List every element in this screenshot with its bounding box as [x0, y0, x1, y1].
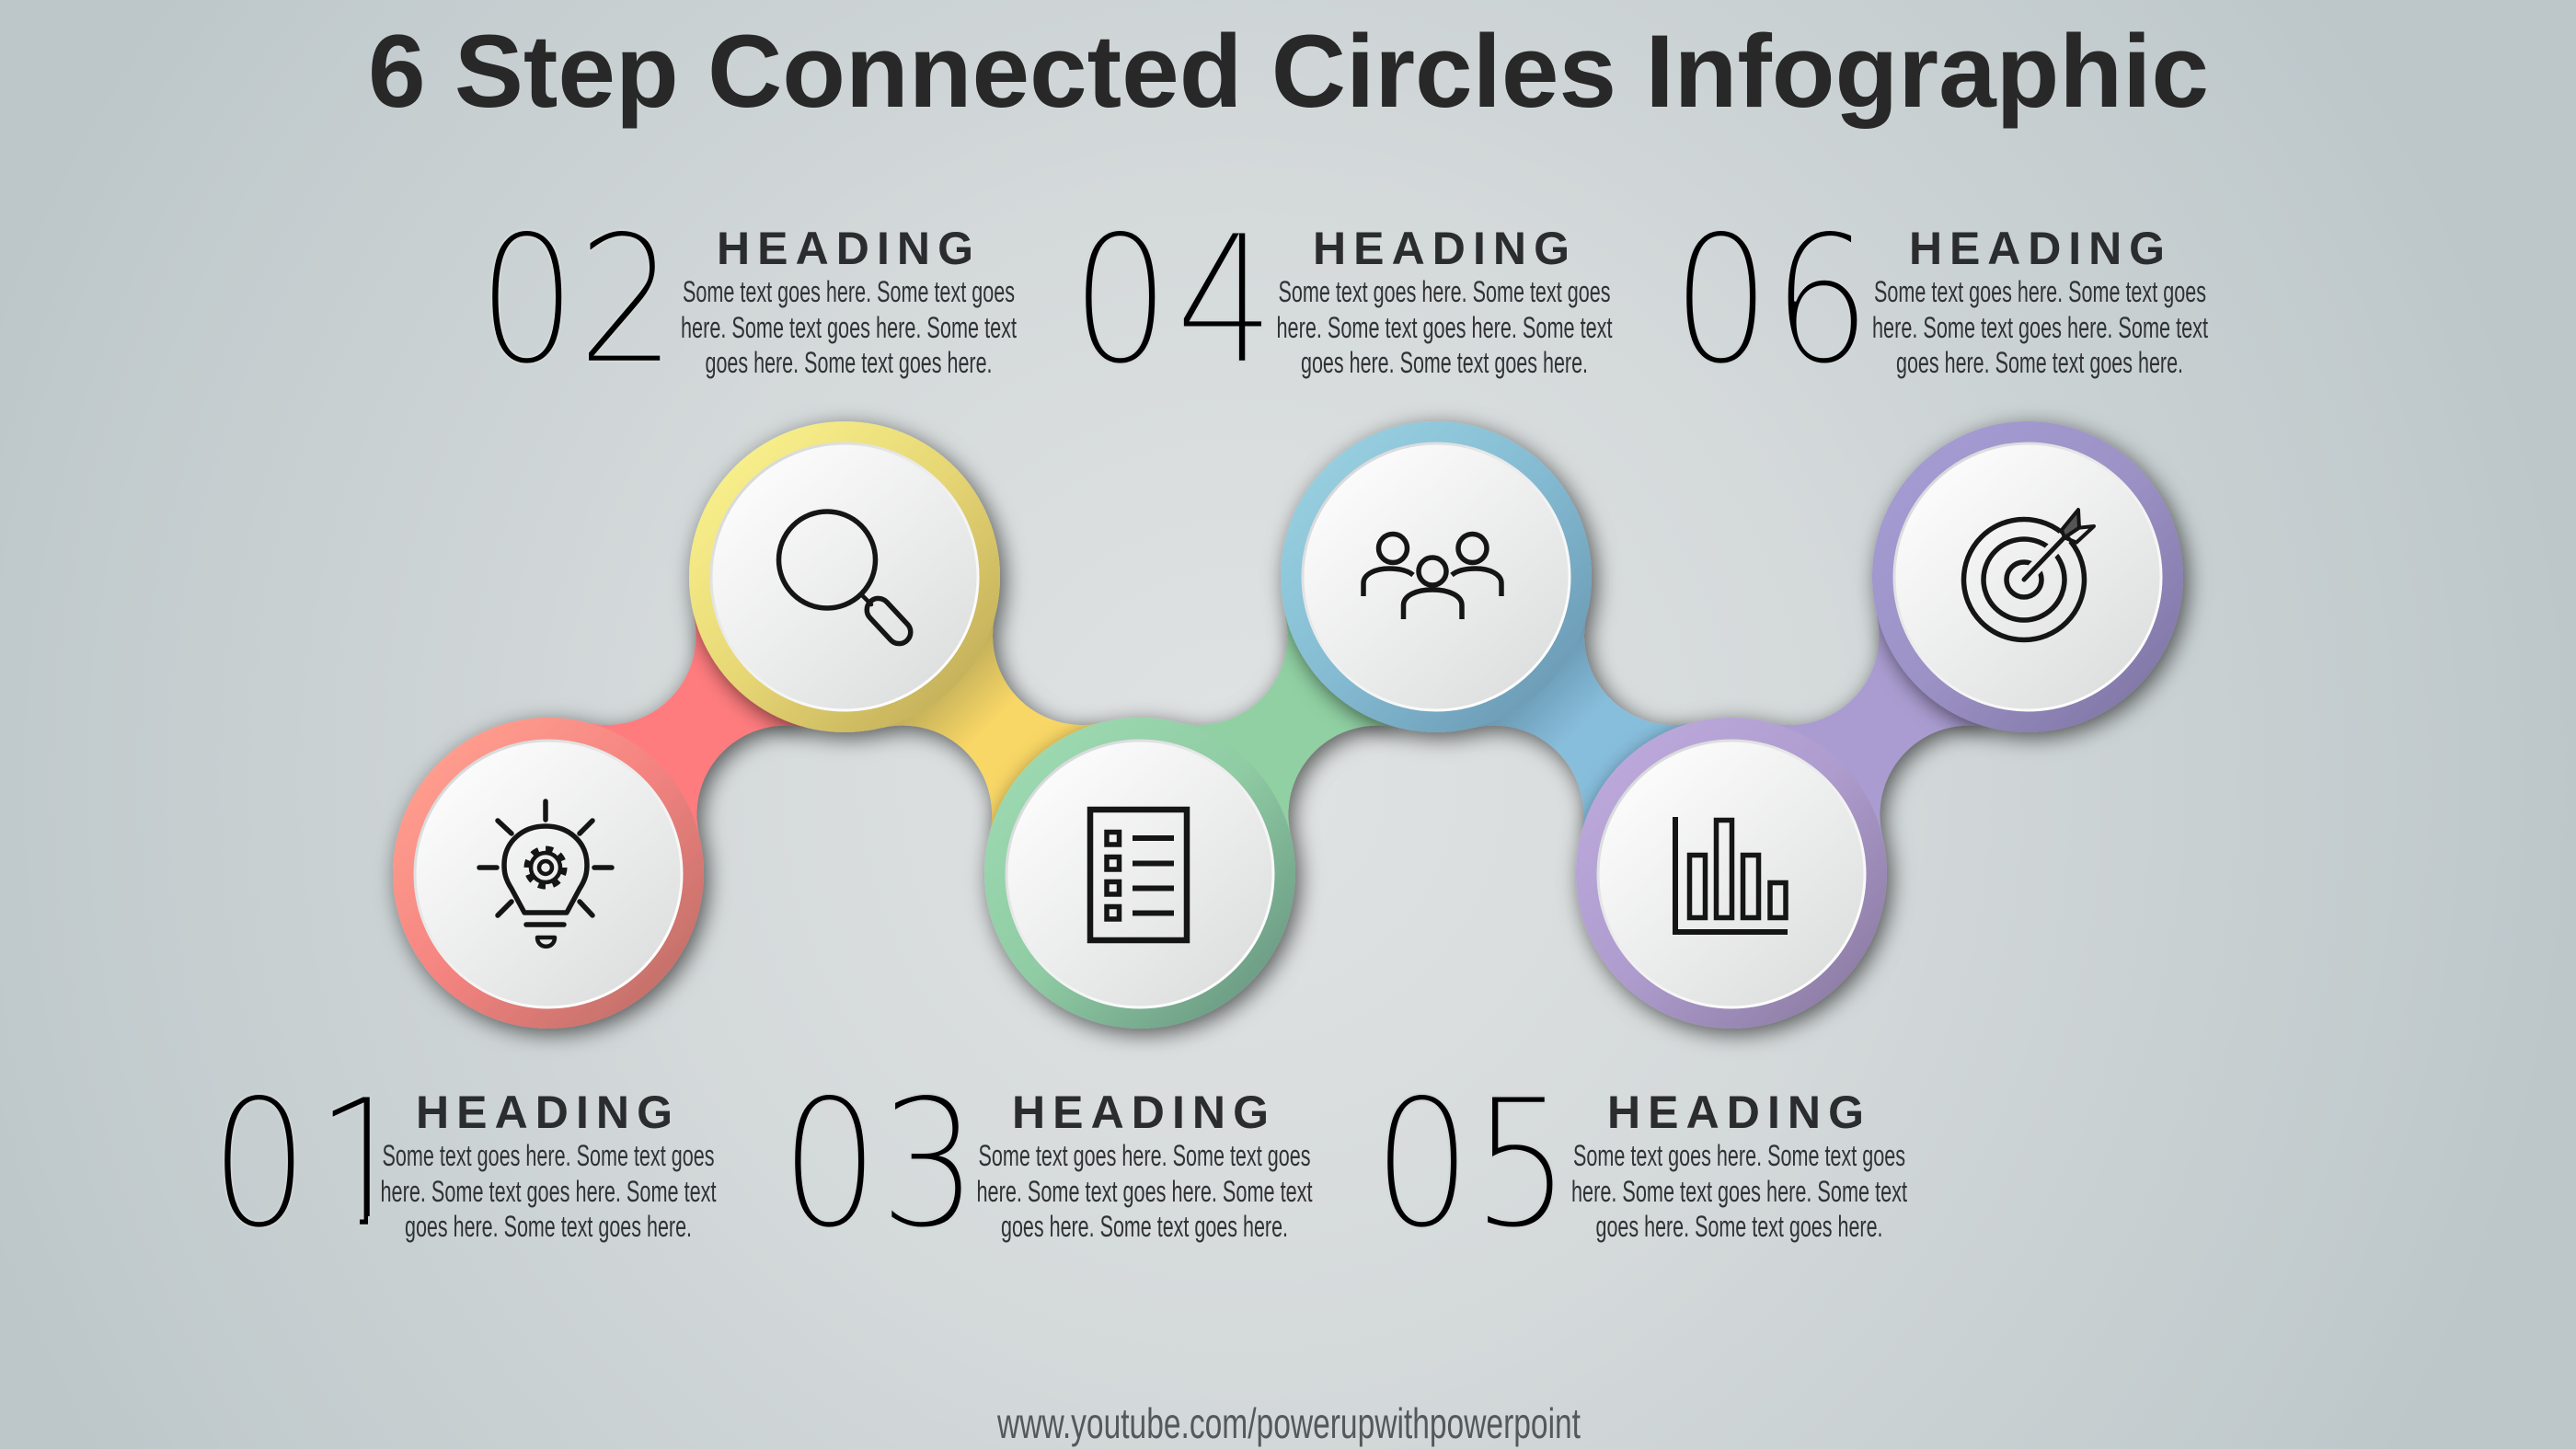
- heading 04: HEADING: [1313, 223, 1570, 274]
- icon: light bulb with gear: [479, 801, 612, 947]
- body text 06: [1872, 275, 2208, 379]
- outer ring: step 4: [1281, 421, 1592, 732]
- icon: bar chart: [1675, 817, 1788, 932]
- heading 01: HEADING: [416, 1087, 673, 1138]
- step 6 circle: [1872, 421, 2183, 732]
- number 04: 04: [1071, 197, 1275, 404]
- heading 06: HEADING: [1909, 223, 2165, 274]
- inner white disc: step 6: [1894, 443, 2161, 710]
- body text 05: goes here. Some text goes here.: [1595, 1210, 1882, 1243]
- body text 05: Some text goes here. Some text goes: [1573, 1139, 1905, 1172]
- inner white disc: step 4: [1303, 443, 1570, 710]
- body text 02: Some text goes here. Some text goes: [683, 275, 1015, 308]
- body text 04: [1277, 275, 1613, 379]
- icon: three people: [1363, 534, 1501, 619]
- inner white disc: step 3: [1006, 741, 1273, 1007]
- body text 04: goes here. Some text goes here.: [1301, 346, 1588, 379]
- body text 04: Some text goes here. Some text goes: [1279, 275, 1610, 308]
- outer ring: step 5: [1576, 718, 1887, 1029]
- number 03: 03: [780, 1061, 978, 1268]
- title: 6 Step Connected Circles Infographic: [368, 14, 2209, 129]
- body text 04: here. Some text goes here. Some text: [1277, 311, 1613, 344]
- step 01 text: [223, 1095, 716, 1242]
- body text 02: [681, 275, 1017, 379]
- icon: magnifying glass: [778, 512, 915, 649]
- heading 02: HEADING: [717, 223, 973, 274]
- body text 03: [977, 1139, 1313, 1243]
- heading 05: HEADING: [1607, 1087, 1864, 1138]
- outer ring: step 2: [689, 421, 1000, 732]
- footer url: www.youtube.com/powerupwithpowerpoint: [996, 1399, 1581, 1447]
- number 06: 06: [1672, 197, 1871, 404]
- body text 01: goes here. Some text goes here.: [405, 1210, 692, 1243]
- body text 05: [1571, 1139, 1907, 1243]
- body text 02: goes here. Some text goes here.: [705, 346, 992, 379]
- body text 03: Some text goes here. Some text goes: [979, 1139, 1310, 1172]
- number 05: 05: [1373, 1061, 1570, 1268]
- step 4 circle with connector: [1281, 421, 1691, 834]
- connector: step 5 to step 6: [1772, 615, 1989, 834]
- body text 06: goes here. Some text goes here.: [1896, 346, 2183, 379]
- inner white disc: step 5: [1598, 741, 1865, 1007]
- step 05 text: [1373, 1061, 1907, 1268]
- number 01: 01: [210, 1061, 414, 1268]
- body text 06: Some text goes here. Some text goes: [1874, 275, 2206, 308]
- inner white disc: step 1: [415, 741, 682, 1007]
- heading 03: HEADING: [1012, 1087, 1269, 1138]
- icon: target with arrow: [1963, 510, 2094, 640]
- step 2 circle with connector: [689, 421, 1100, 834]
- body text 05: here. Some text goes here. Some text: [1571, 1175, 1907, 1208]
- body text 01: here. Some text goes here. Some text: [381, 1175, 717, 1208]
- connector: step 3 to step 4: [1180, 615, 1397, 834]
- step 5 circle with connector: [1576, 615, 1989, 1029]
- body text 02: here. Some text goes here. Some text: [681, 311, 1017, 344]
- number 02: 02: [477, 197, 676, 404]
- inner white disc: step 2: [711, 443, 978, 710]
- step 06 text: [1672, 197, 2208, 404]
- body text 01: Some text goes here. Some text goes: [383, 1139, 714, 1172]
- body text 03: here. Some text goes here. Some text: [977, 1175, 1313, 1208]
- body text 01: [381, 1139, 717, 1243]
- step 02 text: [477, 197, 1017, 404]
- step 03 text: [780, 1061, 1313, 1268]
- step 04 text: [1071, 197, 1613, 404]
- outer ring: step 3: [984, 718, 1295, 1029]
- icon: checklist: [1090, 810, 1187, 940]
- step 3 circle with connector: [984, 615, 1397, 1029]
- step 1 circle with connector: [393, 615, 806, 1029]
- outer ring: step 1: [393, 718, 704, 1029]
- connector: step 1 to step 2: [589, 615, 806, 834]
- body text 06: here. Some text goes here. Some text: [1872, 311, 2208, 344]
- body text 03: goes here. Some text goes here.: [1001, 1210, 1288, 1243]
- connector: step 2 to step 3: [883, 615, 1100, 834]
- connector: step 4 to step 5: [1474, 615, 1691, 834]
